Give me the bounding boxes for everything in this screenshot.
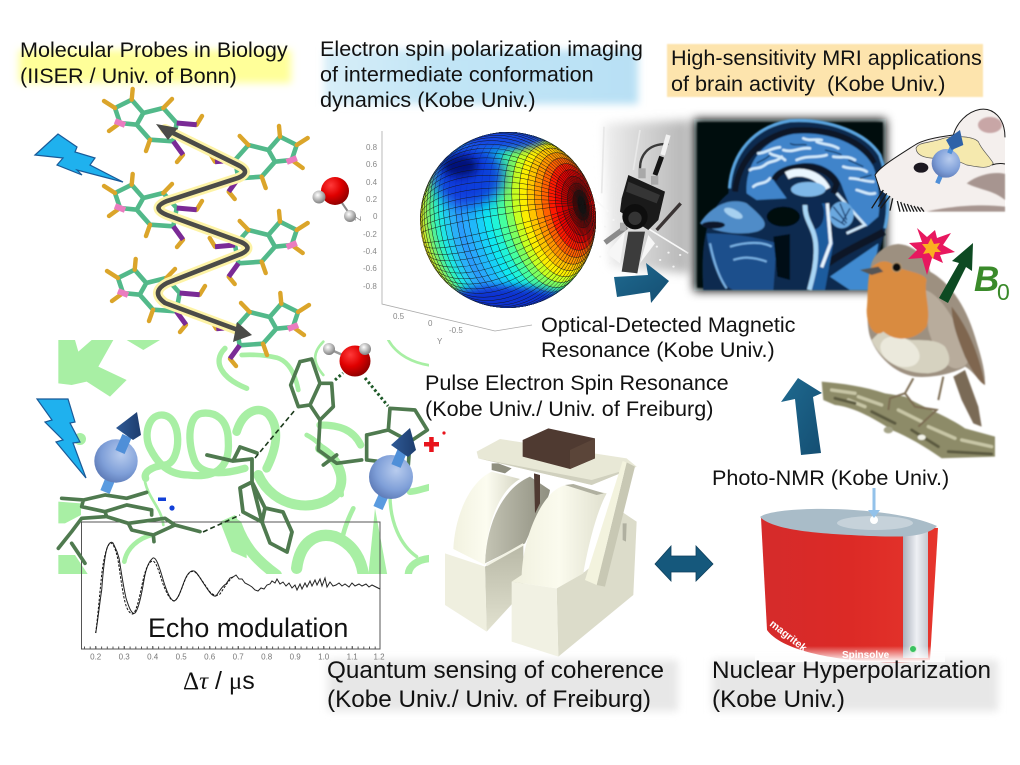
label: B0: B <box>974 260 999 299</box>
legs <box>888 377 943 427</box>
zigzag energy transfer arrow <box>156 124 252 342</box>
plot frame <box>82 522 380 649</box>
axis labels: 0.8 <box>366 143 378 152</box>
panel: mouse with spin <box>872 109 1005 212</box>
sphere surface <box>420 132 596 308</box>
frame lines <box>602 127 640 193</box>
cerebellum <box>830 202 854 228</box>
corpus callosum dark <box>774 167 837 193</box>
branch <box>822 382 995 458</box>
detector body <box>620 175 665 230</box>
x axis tick labels: 0.8 <box>261 652 273 662</box>
axis labels: -0.8 <box>363 282 377 291</box>
corpus callosum bright <box>787 173 827 189</box>
ribbons left half <box>58 340 247 575</box>
arrow: bidirectional <box>655 546 713 581</box>
top plate <box>477 439 637 485</box>
title: molecular probes: Molecular Probes in Biology <box>20 37 288 62</box>
panel: protein ribbon structure <box>58 340 432 575</box>
posterior dark band <box>823 232 884 267</box>
icon: electron spin right <box>369 428 416 508</box>
left yoke block <box>445 544 523 632</box>
x axis tick labels: 0.6 <box>204 652 216 662</box>
highlight: grey quantum sensing band <box>328 660 678 711</box>
lower face <box>707 233 777 290</box>
power LED <box>910 646 916 652</box>
longitude mesh <box>420 132 596 308</box>
highlight: yellow title band <box>19 50 291 83</box>
molecule 2 <box>104 174 202 247</box>
panel: optical setup photograph <box>590 120 690 273</box>
title: electron spin polarization imaging: of intermediate conformation <box>320 62 594 86</box>
label: B0 subscript: 0 <box>997 279 1010 305</box>
slanted bracket <box>585 461 635 587</box>
grey side <box>925 290 969 369</box>
icon: electron spin left <box>94 412 141 492</box>
highlight: orange title band <box>667 44 983 97</box>
x axis tick labels: 1.0 <box>318 652 330 662</box>
chart: spin polarization sphere <box>355 131 596 344</box>
dark skull gap <box>735 130 874 192</box>
x axis tick labels: 0.5 <box>176 652 187 662</box>
label: optical-detected magnetic resonance: Resonance (Kobe Univ.) <box>541 337 775 362</box>
right pole front <box>512 485 607 588</box>
optical post <box>622 232 645 273</box>
curve: simulated trace <box>96 543 233 633</box>
tryptophan centre <box>207 447 292 552</box>
molecule 5 <box>210 211 308 284</box>
molecule 6 <box>211 293 309 366</box>
mouse brain <box>916 137 993 167</box>
spin icon <box>932 130 963 183</box>
x axis tick labels: 0.9 <box>290 652 301 662</box>
icon: water molecule upper <box>312 177 356 222</box>
sample dot <box>870 516 878 524</box>
panel: stacked molecular probes <box>104 89 309 366</box>
lens <box>622 204 648 229</box>
tail <box>953 370 982 427</box>
axis labels: Z <box>354 216 363 221</box>
label: quantum sensing: Quantum sensing of coherence <box>327 657 664 684</box>
axis labels: -0.4 <box>363 247 377 256</box>
highlight: blue title band <box>324 50 638 104</box>
mouse body <box>875 109 1005 212</box>
molecule 4 <box>210 126 308 199</box>
product name: Spinsolve <box>842 650 890 661</box>
orange breast <box>867 261 928 339</box>
axis label: Δτ / μs <box>183 667 255 695</box>
x axis tick labels: 0.4 <box>147 652 159 662</box>
cables <box>605 135 681 243</box>
label: nuclear hyperpolarization: Nuclear Hyperpolarization <box>712 657 991 684</box>
axis labels: 0.5 <box>393 312 405 321</box>
axis labels: 0.4 <box>366 178 378 187</box>
title: molecular probes: (IISER / Univ. of Bonn) <box>20 63 237 88</box>
x axis tick labels <box>84 646 385 662</box>
panel: EPR magnet <box>445 428 637 657</box>
chart label: Echo modulation <box>148 613 348 643</box>
table rail <box>590 195 688 253</box>
white brackets <box>607 232 655 263</box>
facial profile <box>700 201 765 233</box>
left pole front <box>453 472 520 565</box>
panel: MRI brain scan <box>694 119 888 291</box>
icon: lightning upper <box>35 134 123 182</box>
belly <box>872 327 949 373</box>
x axis tick labels: 1.1 <box>347 652 358 662</box>
detector face <box>626 182 660 203</box>
scan background <box>694 119 886 291</box>
molecule 3 <box>107 259 205 332</box>
title: high-sensitivity MRI: High-sensitivity MRI applications <box>671 45 982 70</box>
bright triangle <box>837 193 865 233</box>
cold lobes <box>425 132 563 308</box>
x axis tick labels: 0.2 <box>90 652 102 662</box>
label: pulse electron spin resonance: Pulse Electron Spin Resonance <box>425 370 729 395</box>
icon: magnetic burst <box>908 228 955 275</box>
ear shading <box>978 117 1002 133</box>
notch <box>623 523 627 542</box>
arrow: photo-NMR up to bird <box>781 378 822 455</box>
curve: measured trace <box>96 542 380 633</box>
brand: magritek <box>767 618 809 654</box>
dashed electron path <box>203 410 295 532</box>
axis labels <box>354 143 463 346</box>
setup background <box>603 120 690 273</box>
axis labels: -0.5 <box>449 326 463 335</box>
wing <box>952 307 985 385</box>
right yoke block <box>512 512 637 657</box>
label: pulse electron spin resonance: (Kobe Univ./ Univ. of Freiburg) <box>425 396 713 421</box>
hydrogen bonds <box>335 373 388 406</box>
chart: echo modulation plot <box>82 522 385 695</box>
molecular structure in protein <box>58 359 427 563</box>
x axis tick labels: 0.7 <box>233 652 244 662</box>
highlight: grey nuclear hyperpolarization band <box>712 660 998 711</box>
silver stripe <box>903 528 928 658</box>
axis labels: 0.2 <box>366 195 378 204</box>
arrow: B0 field <box>939 243 973 303</box>
axis labels: 0.6 <box>366 160 378 169</box>
left pole top strip <box>492 463 512 473</box>
red body <box>761 518 938 662</box>
cerebrum <box>747 134 879 227</box>
sample rod <box>534 473 540 513</box>
molecule 1 <box>104 89 202 162</box>
connectors <box>620 168 658 231</box>
tyrosine right <box>367 408 427 465</box>
tryptophan top <box>291 359 362 465</box>
3D axes <box>382 131 532 331</box>
x axis tick labels: 1.2 <box>373 652 385 662</box>
panel: robin on branch <box>822 244 995 458</box>
sample port <box>837 516 913 530</box>
panel: NMR spectrometer <box>755 488 945 662</box>
label: nuclear hyperpolarization: (Kobe Univ.) <box>712 686 845 713</box>
branch texture <box>832 390 992 454</box>
outline <box>875 109 1005 190</box>
thalamus <box>791 182 826 197</box>
radical charge: minus <box>158 498 175 511</box>
icon: lightning lower <box>37 399 86 478</box>
top cover <box>760 509 937 537</box>
label: photo-NMR: Photo-NMR (Kobe Univ.) <box>712 465 949 490</box>
title: electron spin polarization imaging: dynamics (Kobe Univ.) <box>320 87 536 112</box>
x axis tick labels: 0.3 <box>119 652 130 662</box>
eye <box>914 163 928 173</box>
head fill <box>703 120 888 290</box>
arrow: optical setup to MRI <box>614 263 669 303</box>
axis labels: 0 <box>428 319 433 328</box>
table dots <box>600 220 680 267</box>
label: optical-detected magnetic resonance: Optical-Detected Magnetic <box>541 312 796 337</box>
whiskers <box>872 190 924 212</box>
beak <box>860 267 883 275</box>
right pole top strip <box>565 484 604 495</box>
axis labels: Y <box>437 337 443 346</box>
light arrow <box>868 488 880 518</box>
radical charge: plus <box>424 431 446 452</box>
axis labels: -0.6 <box>363 264 377 273</box>
eye <box>892 263 901 272</box>
brown magnet block <box>523 428 595 469</box>
axis labels: 0 <box>373 212 378 221</box>
left pole inner face <box>485 477 550 563</box>
bottom fade <box>755 646 945 662</box>
neck blue <box>830 243 878 290</box>
skull outline <box>729 120 888 228</box>
axis labels: -0.2 <box>363 230 377 239</box>
yoke seam <box>487 544 523 565</box>
title: electron spin polarization imaging: Electron spin polarization imaging <box>320 36 643 61</box>
nasal cavity <box>767 207 800 227</box>
fur shading <box>927 173 1005 212</box>
body <box>867 244 985 385</box>
gyri folds <box>750 138 875 194</box>
icon: water molecule lower <box>323 343 371 376</box>
pigment left <box>58 492 200 563</box>
label: quantum sensing: (Kobe Univ./ Univ. of Freiburg) <box>327 686 651 713</box>
ribbons right half <box>237 340 432 575</box>
brainstem <box>807 203 833 290</box>
title: high-sensitivity MRI: of brain activity (Kobe Univ.) <box>671 71 945 96</box>
